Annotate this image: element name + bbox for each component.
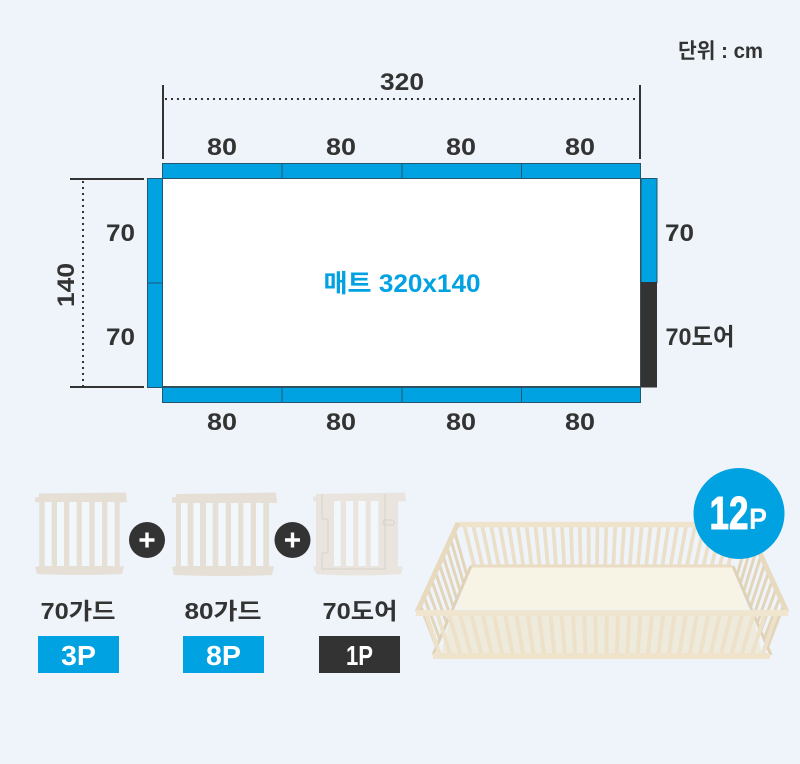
- width dimension: 320: 320: [380, 69, 424, 96]
- right guard: [641, 178, 657, 282]
- component: 70 door: [313, 492, 406, 673]
- top guards: [162, 164, 640, 178]
- left guards: [148, 178, 162, 388]
- floor seen through front fence: [441, 612, 762, 654]
- top size labels: 80: [207, 134, 237, 161]
- quantity badge: 3P: [38, 636, 119, 673]
- right size labels: 70도어: [666, 324, 734, 351]
- front fence bars: [426, 614, 776, 655]
- icon: 70 guard panel: [35, 492, 127, 575]
- top size labels: 80: [326, 134, 356, 161]
- height dimension: 140: 140: [53, 263, 80, 307]
- front top rail: [416, 610, 788, 616]
- left size labels: [106, 220, 135, 351]
- mat surface: [457, 567, 747, 609]
- badge: 12P: [694, 468, 784, 559]
- bottom size labels: 80: [326, 409, 356, 436]
- mat 320x140: 매트 320x140: [324, 270, 480, 298]
- back rails: [458, 522, 746, 527]
- right size labels: [665, 220, 734, 351]
- component: 80 guard: [172, 492, 277, 673]
- top size labels: [207, 134, 595, 161]
- unit label: 단위 : cm: [678, 40, 763, 63]
- top size labels: 80: [446, 134, 476, 161]
- icon: 70 door panel: [313, 492, 406, 576]
- width dimension: 320: [163, 69, 640, 159]
- quantity badge: 3P: 3P: [61, 640, 96, 671]
- label: 70도어: [322, 598, 398, 624]
- icon: plus: [274, 522, 310, 558]
- bottom size labels: [207, 409, 595, 436]
- quantity badge: 1P: [319, 636, 400, 673]
- front bottom rail: [433, 653, 770, 659]
- left side bars: [420, 530, 467, 647]
- component: 70 guard: [35, 492, 127, 673]
- bottom size labels: 80: [207, 409, 237, 436]
- bottom size labels: 80: [446, 409, 476, 436]
- bottom size labels: 80: [565, 409, 595, 436]
- product image: assembled playpen: [416, 523, 788, 659]
- quantity badge: 8P: [183, 636, 264, 673]
- right side bars: [737, 530, 784, 647]
- badge: 12P: 12: [710, 487, 748, 539]
- quantity badge: 1P: 1P: [346, 640, 373, 671]
- quantity badge: 8P: 8P: [206, 640, 241, 671]
- height dimension: 140: [53, 179, 144, 387]
- bottom guards: [162, 388, 640, 402]
- icon: 80 guard panel: [172, 492, 277, 576]
- mat 320x140: [162, 178, 640, 386]
- icon: plus: [129, 522, 165, 558]
- label: 80가드: [184, 598, 262, 624]
- left size labels: 70: [106, 324, 135, 351]
- diagram: mat layout with dimensions: [53, 69, 734, 436]
- back fence bars: [464, 524, 740, 565]
- side rails: [417, 523, 787, 612]
- right size labels: 70: [665, 220, 694, 247]
- right door: [641, 282, 657, 388]
- label: 70가드: [40, 598, 115, 624]
- top size labels: 80: [565, 134, 595, 161]
- badge: 12P: P: [749, 503, 767, 536]
- left size labels: 70: [106, 220, 135, 247]
